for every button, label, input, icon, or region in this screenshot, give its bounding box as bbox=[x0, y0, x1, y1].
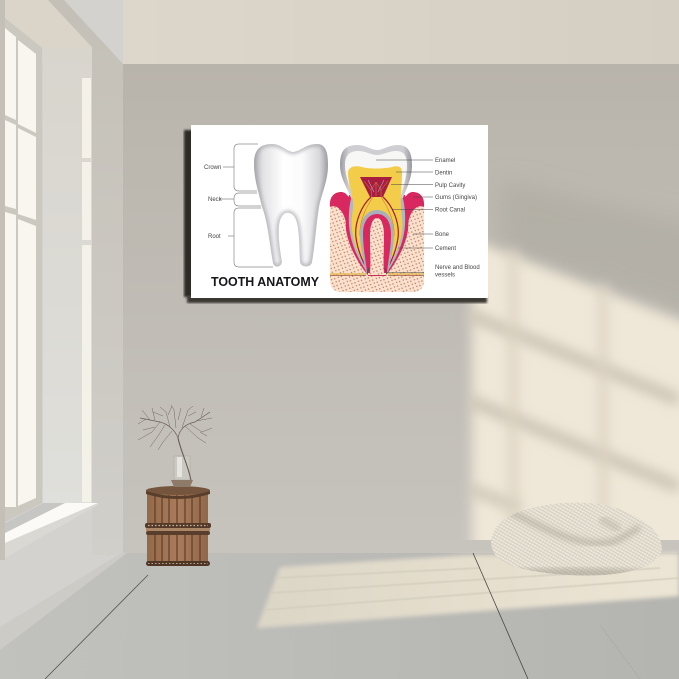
cementum layer bbox=[349, 195, 405, 272]
labels: left: Neck bbox=[208, 197, 223, 203]
heading: TOOTH ANATOMY bbox=[211, 274, 319, 289]
pulp cavity bbox=[360, 177, 392, 197]
stool bbox=[145, 486, 211, 566]
enamel bbox=[340, 145, 412, 198]
pouf bbox=[490, 503, 662, 580]
bone bbox=[330, 204, 424, 292]
window panes bbox=[5, 28, 36, 507]
cross-section of tooth bbox=[330, 145, 424, 292]
inner bone arch bbox=[360, 210, 394, 274]
left wall and window bbox=[0, 0, 123, 650]
window sill bbox=[5, 503, 98, 558]
floor sunlight bbox=[257, 553, 679, 628]
labels: right: Root Canal bbox=[435, 208, 465, 214]
skirting board bbox=[0, 540, 679, 650]
labels: right: Gums (Gingiva) bbox=[435, 195, 477, 201]
gums bbox=[330, 192, 424, 232]
labels: right: Pulp Cavity bbox=[435, 183, 465, 189]
back wall bbox=[123, 64, 679, 542]
left brackets bbox=[219, 144, 273, 267]
vase with branches bbox=[138, 405, 212, 487]
leader lines bbox=[376, 160, 433, 272]
labels: left: Root bbox=[208, 234, 221, 240]
poster: tooth anatomy bbox=[191, 125, 488, 298]
labels: right: vessels bbox=[435, 272, 455, 278]
labels: right: Bone bbox=[435, 232, 450, 238]
dentin bbox=[348, 166, 402, 271]
picture shadow bbox=[184, 130, 487, 303]
labels: left: Crown bbox=[204, 165, 221, 171]
sunlit recess strip bbox=[82, 78, 91, 502]
labels: right: Cement bbox=[435, 246, 456, 252]
labels: right bbox=[435, 158, 480, 278]
floor seams bbox=[45, 553, 640, 679]
sunlight on wall bbox=[470, 180, 679, 560]
labels: right: Dentin bbox=[435, 170, 452, 176]
ceiling bbox=[64, 0, 679, 64]
labels: right: Enamel bbox=[435, 158, 455, 164]
labels: right: Nerve and Blood bbox=[435, 265, 480, 271]
floor bbox=[0, 553, 679, 679]
labels: left bbox=[204, 165, 223, 240]
icon: white tooth bbox=[254, 144, 328, 267]
root canals bbox=[356, 197, 398, 271]
vessels bbox=[330, 268, 424, 276]
root outer gum layer bbox=[346, 195, 408, 273]
